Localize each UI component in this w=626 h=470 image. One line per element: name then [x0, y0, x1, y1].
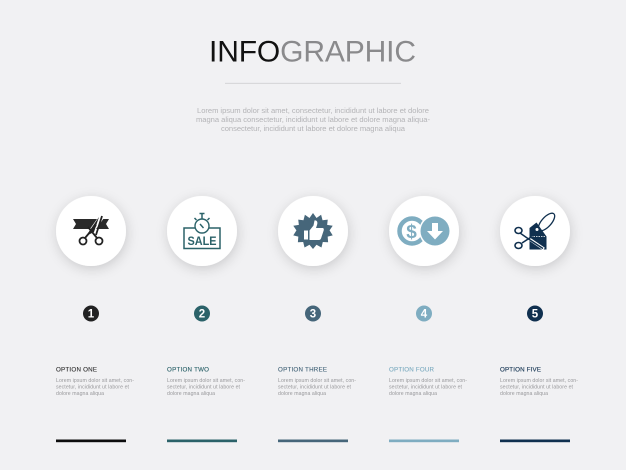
number badge 3: 3 [310, 309, 316, 321]
option five text: Lorem ipsum dolor sit amet, con- [500, 378, 578, 384]
panel: option three [278, 196, 356, 442]
option one text [56, 366, 134, 397]
icon: dollar with down arrow [389, 196, 459, 266]
intro text: consectetur, incididunt ut labore et dolore magna aliqua [221, 124, 406, 133]
option one text: Lorem ipsum dolor sit amet, con- [56, 378, 134, 384]
option four text: OPTION FOUR [389, 366, 435, 373]
icon: dollar with down arrow: $ [406, 222, 417, 243]
option two text: sectetur, incididunt ut labore et [167, 384, 241, 390]
number badge 1: 1 [88, 309, 95, 321]
icon: thumbs up badge [278, 196, 348, 266]
option three text: sectetur, incididunt ut labore et [278, 384, 352, 390]
option three text: Lorem ipsum dolor sit amet, con- [278, 378, 356, 384]
icon: sale stopwatch [167, 196, 237, 266]
option four text: dolore magna aliqua [389, 391, 437, 397]
option five text: dolore magna aliqua [500, 391, 548, 397]
option one text: sectetur, incididunt ut labore et [56, 384, 130, 390]
option one text: OPTION ONE [56, 366, 97, 373]
number badge 3 [305, 306, 321, 322]
option four text: sectetur, incididunt ut labore et [389, 384, 463, 390]
number badge 2: 2 [199, 309, 205, 321]
intro text: Lorem ipsum dolor sit amet, consectetur, incididunt ut labore et dolore [197, 106, 429, 115]
number badge 5: 5 [532, 309, 539, 321]
option three text: OPTION THREE [278, 366, 327, 373]
option five text [500, 366, 578, 397]
number badge 4 [416, 306, 432, 322]
option three text [278, 366, 356, 397]
intro text [196, 106, 430, 133]
option one text: dolore magna aliqua [56, 391, 104, 397]
number badge 4: 4 [421, 309, 428, 321]
number badge 2 [194, 306, 210, 322]
option two text: dolore magna aliqua [167, 391, 215, 397]
icon: sale stopwatch: SALE [188, 236, 217, 248]
panel: option five [500, 196, 578, 442]
panel: option two [167, 196, 245, 442]
option two text: OPTION TWO [167, 366, 209, 373]
panel: option four [389, 196, 467, 442]
option two text [167, 366, 245, 397]
icon: scissors cutting price tag [500, 196, 570, 266]
panel: option one [56, 196, 134, 442]
intro text: magna aliqua consectetur, incididunt ut labore et dolore magna aliqua- [196, 115, 430, 124]
option four text: Lorem ipsum dolor sit amet, con- [389, 378, 467, 384]
number badge 5 [527, 306, 543, 322]
option five text: sectetur, incididunt ut labore et [500, 384, 574, 390]
title: INFOGRAPHIC [209, 36, 416, 68]
option two text: Lorem ipsum dolor sit amet, con- [167, 378, 245, 384]
option three text: dolore magna aliqua [278, 391, 326, 397]
number badge 1 [83, 306, 99, 322]
icon: scissors cutting ribbon [56, 196, 126, 266]
option four text [389, 366, 467, 397]
option five text: OPTION FIVE [500, 366, 541, 373]
